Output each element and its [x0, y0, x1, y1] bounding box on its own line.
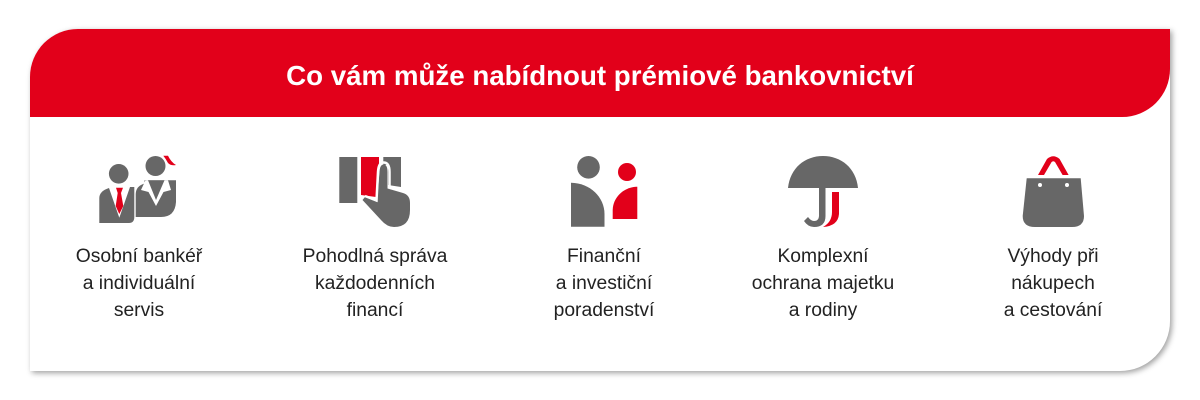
- text: financial advice: [554, 246, 654, 321]
- icon: umbrella: [788, 156, 858, 227]
- icon: hand on book: [339, 157, 410, 227]
- text: financial advice: Finanční: [567, 246, 641, 267]
- text: everyday finances: financí: [347, 300, 403, 321]
- text: protection: a rodiny: [789, 300, 857, 321]
- text: financial advice: a investiční: [556, 273, 652, 294]
- icon: financial advisers: [571, 156, 637, 227]
- text: benefits: Výhody při: [1007, 246, 1099, 267]
- text: benefits: [1004, 246, 1102, 321]
- text: personal banker: a individuální: [83, 273, 195, 294]
- text: personal banker: Osobní bankéř: [76, 246, 202, 267]
- text: everyday finances: Pohodlná správa: [303, 246, 447, 267]
- text: everyday finances: každodenních: [315, 273, 435, 294]
- text: protection: [752, 246, 894, 321]
- text: benefits: nákupech: [1011, 273, 1095, 294]
- text: everyday finances: [303, 246, 448, 321]
- text: financial advice: poradenství: [554, 300, 654, 321]
- text: personal banker: servis: [114, 300, 164, 321]
- icon: personal bankers: [99, 156, 176, 223]
- text: benefits: a cestování: [1004, 300, 1102, 321]
- icon: shopping bag: [1023, 156, 1084, 227]
- text: protection: Komplexní: [777, 246, 869, 267]
- text: protection: ochrana majetku: [752, 273, 894, 294]
- text: personal banker: [76, 246, 202, 321]
- title: Co vám může nabídnout prémiové bankovnictví: [286, 60, 914, 91]
- header band: [30, 29, 1170, 117]
